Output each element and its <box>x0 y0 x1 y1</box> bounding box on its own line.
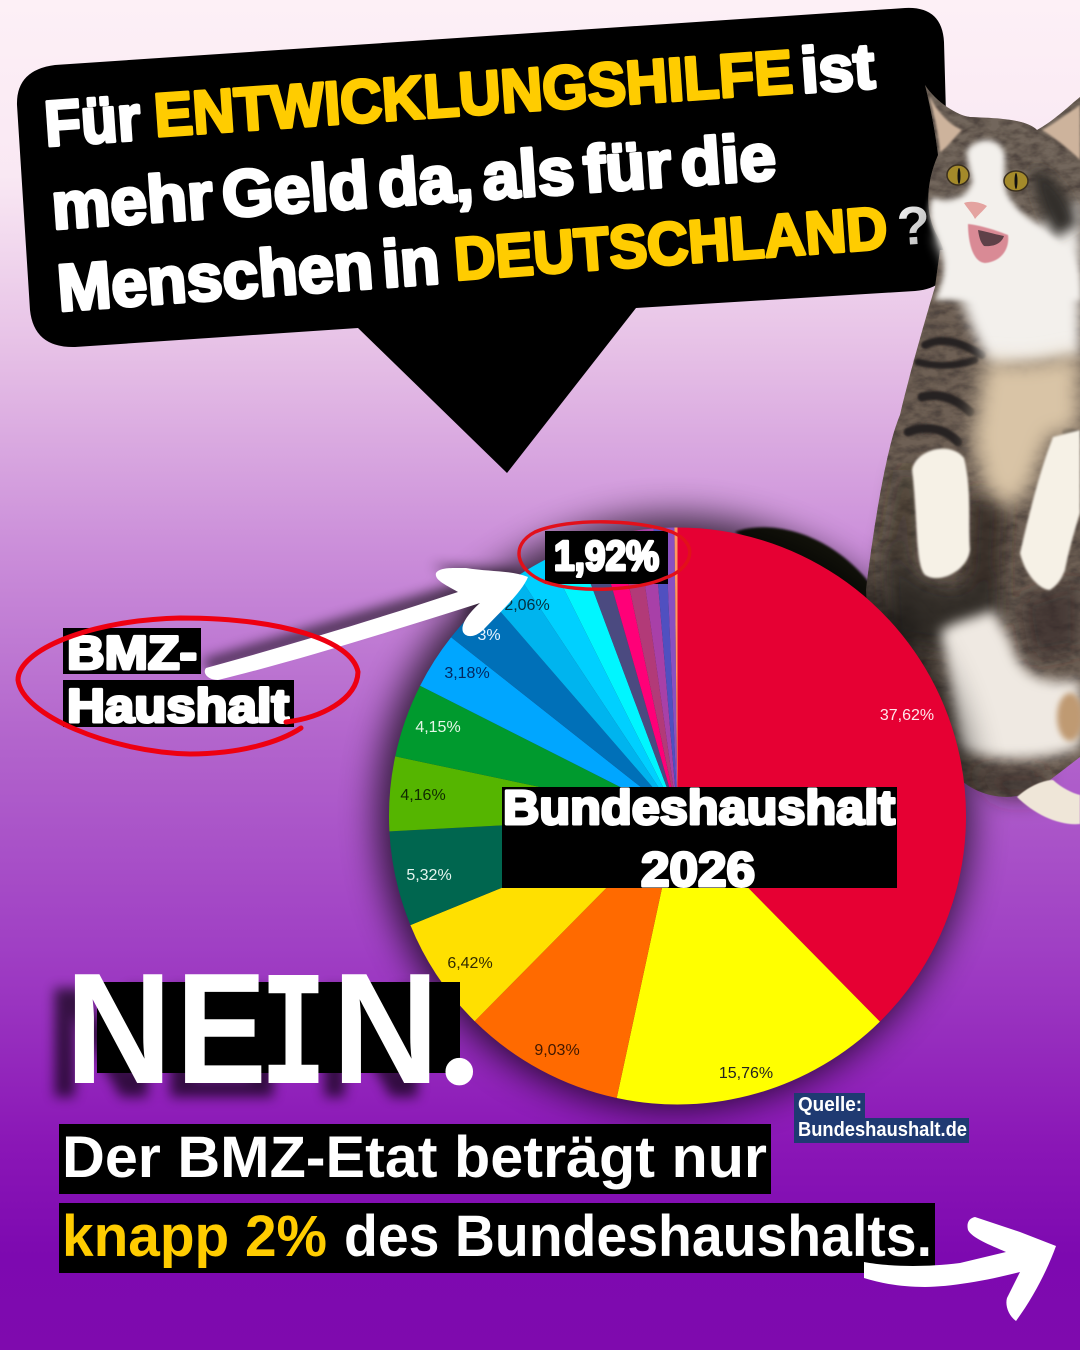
headline line 1: ENTWICKLUNGSHILFE <box>152 37 795 149</box>
answer shadow: NEIN <box>44 955 428 1131</box>
swipe arrow <box>864 1217 1056 1321</box>
pointer arrow from BMZ-Haushalt to slice <box>202 565 528 680</box>
red hand-drawn circle around value <box>519 522 690 589</box>
subline box <box>59 1203 935 1273</box>
headline line 3: ? <box>895 195 932 257</box>
answer box <box>97 982 460 1073</box>
left eye <box>947 165 969 185</box>
cream chest fur <box>972 352 1080 510</box>
slice labels: 2,06% <box>504 597 550 614</box>
headline line 1: ist <box>798 30 877 107</box>
slice labels: 9,03% <box>534 1042 580 1059</box>
Bundeshaushalt text: Bundeshaushalt <box>503 782 895 835</box>
slice labels: 4,15% <box>415 719 461 736</box>
open mouth <box>968 224 1008 263</box>
period: . <box>438 932 480 1120</box>
pie shadow <box>377 516 971 1110</box>
cat photo illustration <box>735 85 1080 824</box>
pie slices <box>389 527 966 1104</box>
headline line 1: Für <box>42 82 143 160</box>
letter E: E <box>176 941 267 1117</box>
tabby stripes <box>908 341 1080 442</box>
right ear inner <box>1042 105 1080 160</box>
subline 2 <box>59 1203 935 1273</box>
letter I: I <box>260 947 327 1133</box>
dark fur zones <box>885 470 1080 800</box>
source box line 2 <box>794 1118 969 1143</box>
cat belly <box>940 610 1080 759</box>
white face blaze and muzzle <box>930 140 1080 300</box>
subline box <box>59 1124 771 1194</box>
arrow shadow <box>202 565 522 671</box>
label: 1,92 percent <box>519 522 690 589</box>
subline 1 <box>59 1124 771 1194</box>
label: BMZ-Haushalt <box>18 618 358 754</box>
cat tail <box>735 527 875 640</box>
pie chart: Bundeshaushalt 2026 <box>377 516 971 1110</box>
nose <box>964 202 987 219</box>
right eye <box>1004 171 1028 191</box>
speech bubble with headline <box>17 8 950 473</box>
value text: 1,92% <box>554 532 659 579</box>
Haushalt label box <box>63 680 294 727</box>
right front paw <box>1020 430 1080 590</box>
red hand-drawn circle around label <box>18 618 358 754</box>
left front paw <box>912 449 970 578</box>
highlighted text: knapp 2% <box>62 1204 327 1269</box>
slice labels <box>400 597 934 1082</box>
BMZ text: BMZ- <box>67 626 197 679</box>
headline line 2: mehr Geld da, als für die <box>49 119 778 243</box>
value box <box>545 531 668 584</box>
source line 2: Bundeshaushalt.de <box>798 1119 967 1141</box>
headline line 3: DEUTSCHLAND <box>452 194 890 293</box>
slice labels: 3,18% <box>444 665 490 682</box>
slice labels: 6,42% <box>447 955 493 972</box>
white neck and chest <box>936 200 1080 365</box>
subline text: Der BMZ-Etat beträgt nur <box>62 1125 767 1190</box>
slice labels: 37,62% <box>880 707 934 724</box>
headline line 3 <box>55 187 933 325</box>
letter N: N <box>332 941 439 1117</box>
subline text: des Bundeshaushalts. <box>344 1204 932 1269</box>
source note <box>794 1093 969 1143</box>
big answer: NEIN. <box>44 932 480 1133</box>
cat hind foot <box>1017 780 1080 824</box>
slice labels: 5,32% <box>406 867 452 884</box>
arrow shape <box>205 568 528 680</box>
slice labels: 15,76% <box>719 1065 773 1082</box>
headline line 3: Menschen in <box>55 223 442 325</box>
slice labels: 4,16% <box>400 787 446 804</box>
year text: 2026 <box>641 844 755 897</box>
bubble shape <box>17 8 950 473</box>
BMZ label box <box>63 628 201 674</box>
label box <box>502 787 897 888</box>
source line 1: Quelle: <box>798 1094 862 1116</box>
left ear inner <box>929 95 962 152</box>
slice labels: 3% <box>477 627 501 644</box>
dark head patch <box>1032 168 1078 238</box>
Haushalt text: Haushalt <box>67 679 289 732</box>
letter N: N <box>65 941 172 1117</box>
source box line 1 <box>794 1093 865 1118</box>
belly orange patch <box>1057 693 1080 741</box>
cat fur base: body and head <box>866 85 1080 797</box>
label: Bundeshaushalt 2026 <box>502 782 897 897</box>
